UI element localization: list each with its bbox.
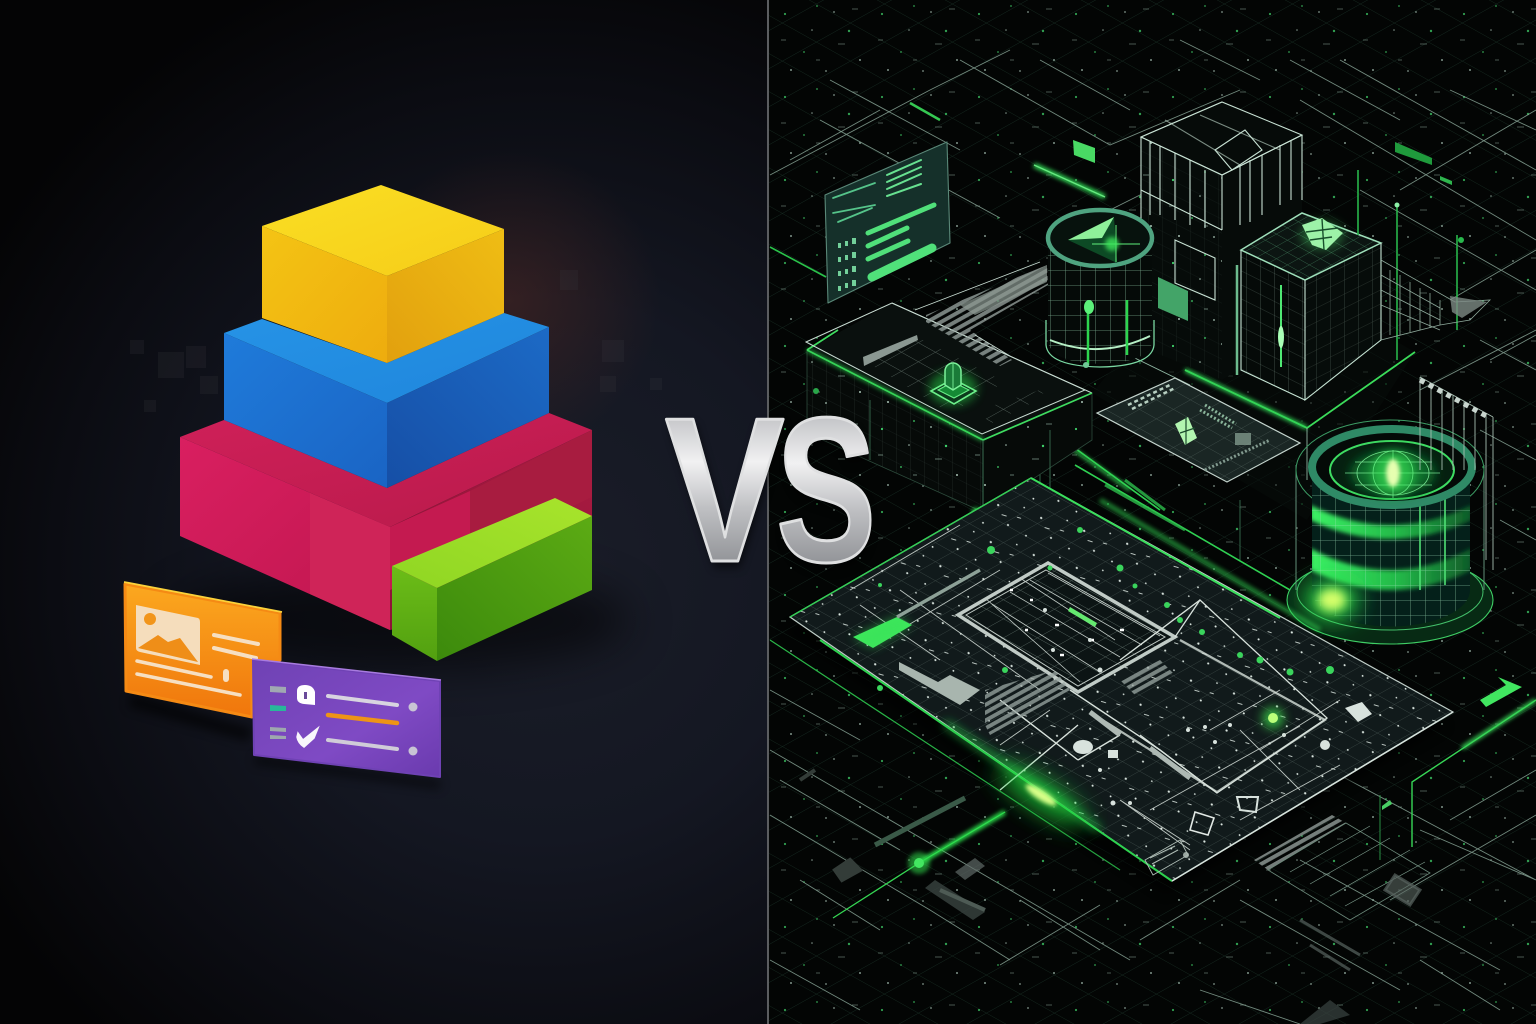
block: blue: [224, 313, 549, 488]
gray stepped strip: [915, 262, 1048, 366]
panel: blueprint sheet: [784, 478, 1453, 895]
background circuit traces: [770, 40, 1536, 1024]
side rack: [1381, 260, 1490, 340]
big glowing cylinder: [1287, 377, 1493, 644]
blueprint corner marks: [1145, 812, 1214, 875]
stacked blocks: [170, 185, 630, 670]
inner window: [958, 563, 1175, 692]
glow dot: [1262, 707, 1284, 729]
icon: green beacon: [929, 363, 977, 405]
platform under towers: [1040, 334, 1416, 590]
card: purple checklist card: [252, 659, 441, 785]
VS title: S: [776, 376, 876, 606]
left platform: [806, 303, 1092, 516]
card: orange image card: [124, 582, 282, 735]
large room outlines: [850, 525, 1340, 850]
central tall cube: [1141, 102, 1302, 380]
green accent segments: [770, 103, 1536, 918]
VS title: S: [778, 382, 877, 612]
background hatch blocks: [800, 770, 1430, 1024]
block: yellow: [262, 185, 504, 363]
VS title: [665, 374, 877, 612]
blueprint glowing edges: [790, 478, 1453, 881]
block: green: [392, 498, 592, 661]
blueprint flare: [991, 756, 1091, 834]
gray end tag on rack: [1450, 296, 1487, 318]
hatch group: [985, 670, 1070, 735]
green data dots: [877, 527, 1334, 691]
green blueprint tag: [853, 570, 980, 648]
gray node blobs: [1043, 608, 1372, 858]
right tower: [1237, 170, 1464, 400]
block: pink base: [170, 413, 630, 670]
panel: left background: [0, 0, 768, 1024]
left cylinder: [1046, 210, 1154, 368]
floating data panel: [825, 142, 950, 303]
center divider: [767, 0, 769, 1024]
icon: green shield: [1300, 218, 1344, 250]
gray staircase: [899, 662, 980, 705]
mid chip panel: [1097, 378, 1300, 482]
panel: right background: [768, 0, 1536, 1024]
VS title: V: [668, 380, 786, 611]
VS title: V: [665, 374, 785, 605]
